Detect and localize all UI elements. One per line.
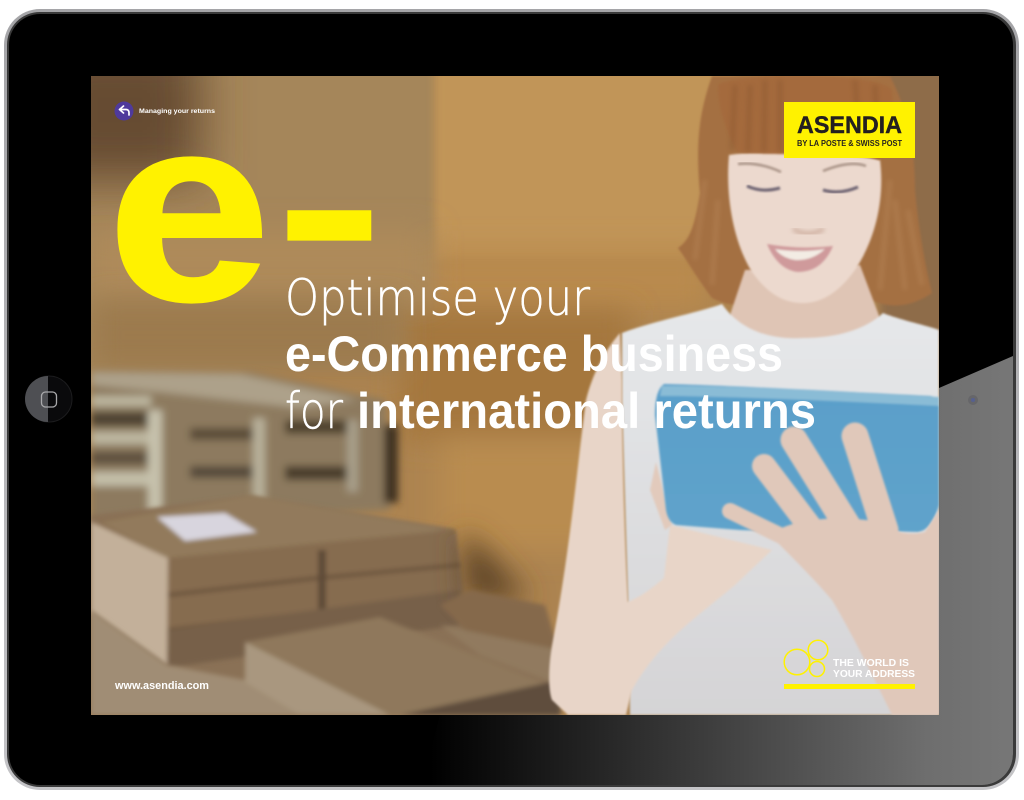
back navigation [114, 102, 215, 120]
face [728, 152, 881, 303]
slogan text: THE WORLD IS [833, 657, 909, 669]
icon: back arrow [114, 102, 134, 120]
cardboard box stack [91, 495, 460, 668]
yellow dash: - [274, 62, 384, 346]
icon: home button [25, 376, 72, 422]
right hand and forearm [730, 436, 939, 715]
hair [678, 76, 932, 305]
nose [793, 229, 824, 234]
heading [285, 269, 816, 440]
left arm [549, 333, 772, 715]
icon: camera [968, 395, 978, 405]
floor and front box [91, 590, 560, 715]
logo wordmark: ASENDIA [797, 112, 902, 139]
heading line 3 prefix: for [285, 382, 343, 440]
hair strands [695, 180, 922, 290]
bangs strands [732, 84, 876, 148]
left hand fingers [650, 462, 672, 530]
logo: Asendia [784, 102, 915, 158]
tablet in hand [655, 384, 939, 532]
floor base [91, 497, 560, 715]
slogan text: YOUR ADDRESS [833, 668, 915, 680]
slogan text [833, 657, 915, 680]
background behind forearm [938, 560, 939, 650]
bangs [738, 76, 880, 162]
photo background [91, 76, 939, 715]
eyes [747, 186, 858, 192]
section label: Managing your returns [139, 108, 215, 115]
neck [730, 264, 880, 340]
screen reflection [420, 356, 1013, 790]
website address: www.asendia.com [114, 680, 209, 692]
woman [549, 76, 939, 715]
eyebrows [738, 164, 866, 172]
brand slogan [784, 640, 915, 689]
shadow behind boxes [462, 530, 530, 600]
mouth [767, 244, 833, 272]
white top [622, 304, 939, 715]
heading line 2: e-Commerce business [285, 326, 783, 382]
yellow e: e [107, 61, 271, 357]
pallets [91, 370, 398, 530]
heading line 1: Optimise your [285, 269, 590, 327]
heading line 3: international returns [357, 383, 816, 439]
wooden wall [91, 76, 939, 546]
icon: three circles [784, 640, 828, 676]
logo tagline: BY LA POSTE & SWISS POST [797, 139, 902, 148]
